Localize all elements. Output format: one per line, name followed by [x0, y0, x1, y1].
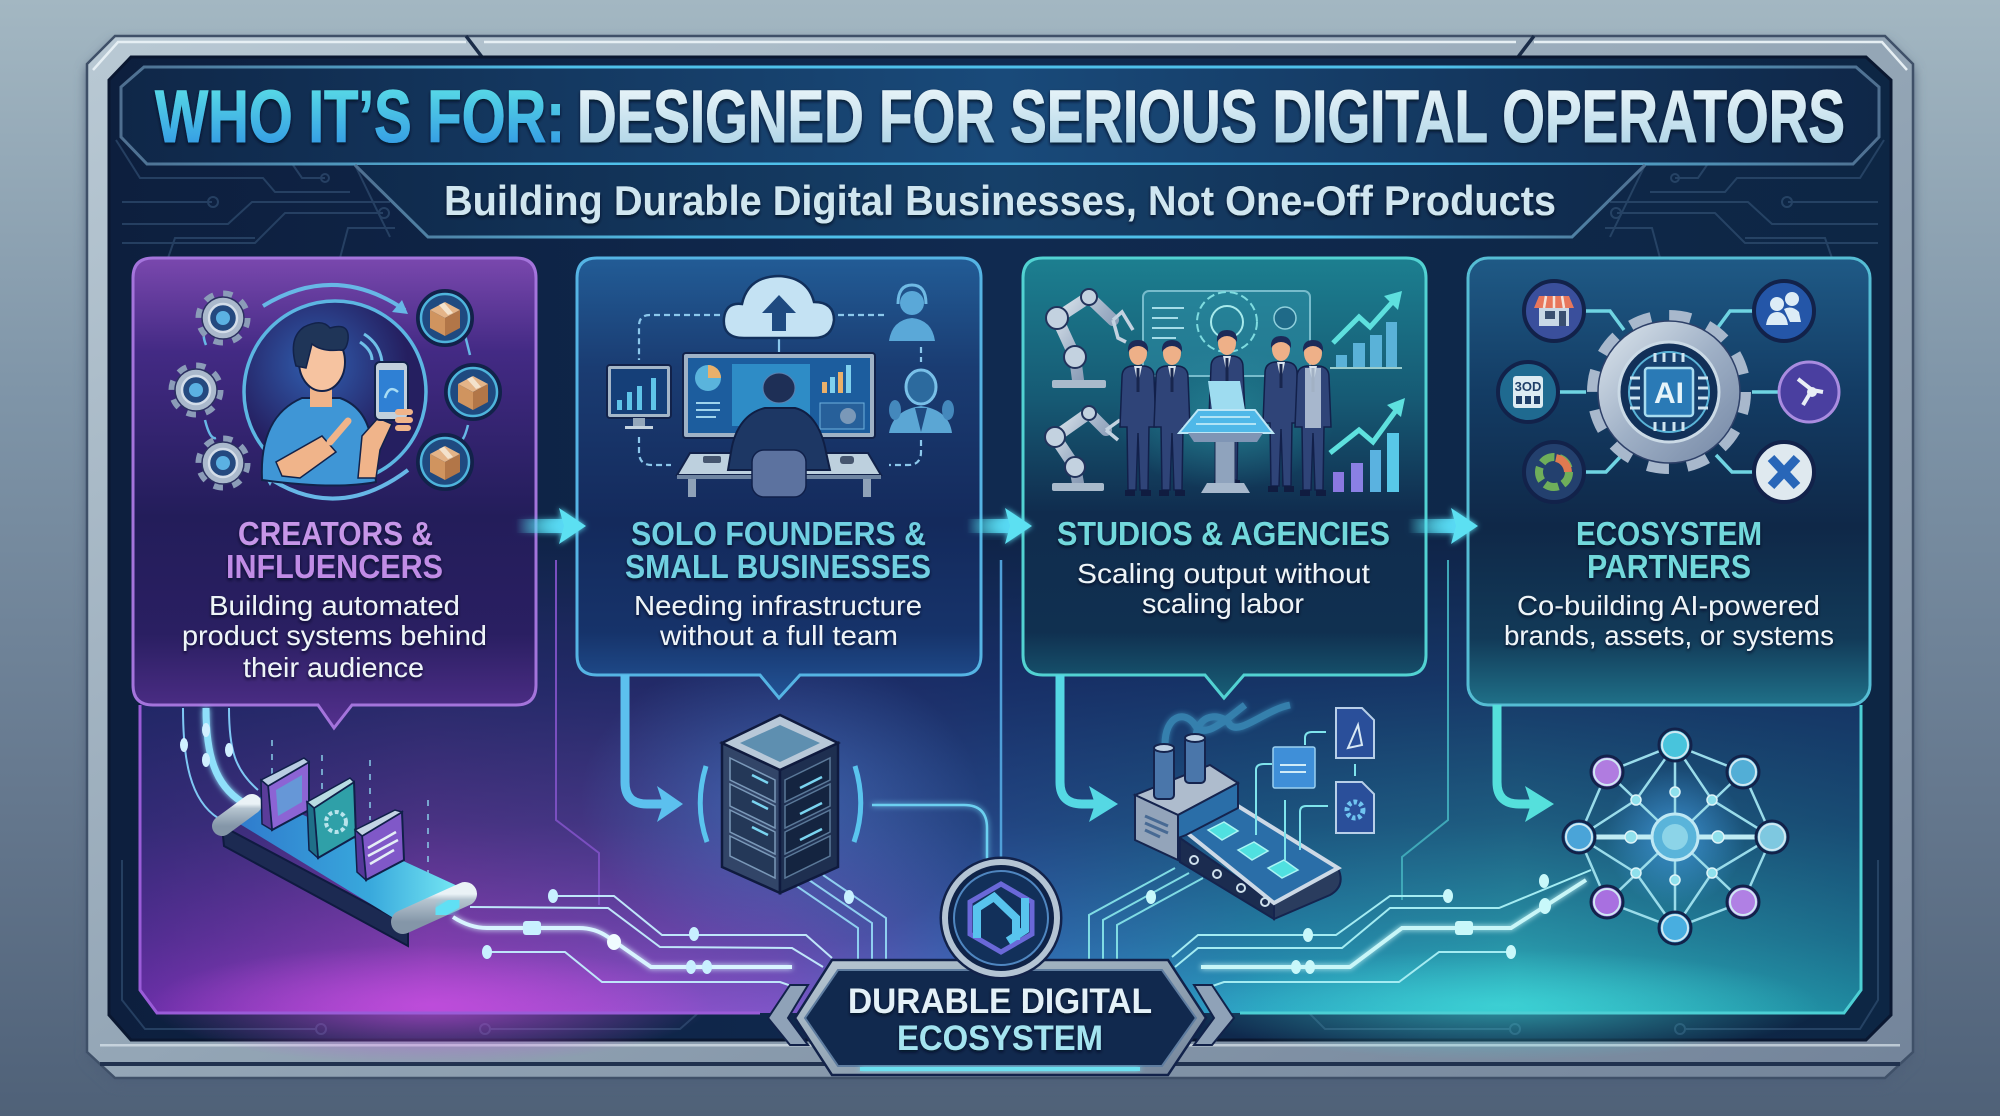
heading: creators: CREATORS & — [238, 515, 433, 552]
description: creators: product systems behind — [182, 620, 487, 651]
partner: people — [1754, 281, 1814, 341]
icon: founder at workstation with cloud — [607, 276, 954, 497]
subtitle text: Building Durable Digital Businesses, Not One-Off Products — [444, 177, 1556, 224]
decorative circuit traces — [116, 140, 1884, 1034]
panel: ecosystem partners — [1468, 258, 1870, 705]
icon: AI gear with partner nodes — [1498, 281, 1839, 502]
subtitle banner — [355, 165, 1645, 237]
icon: conveyor with digital product cards — [180, 708, 465, 946]
partner: network share — [1779, 362, 1839, 422]
description: partners — [1504, 590, 1834, 651]
circuit traces: right — [1089, 868, 1591, 990]
dark main panel — [109, 57, 1891, 1040]
icon: factory with documents — [1135, 705, 1374, 919]
AI chip label: AI — [1654, 377, 1684, 410]
icon: network hub — [1563, 729, 1788, 944]
lower glowing panel — [140, 540, 1861, 1065]
description: studios: scaling labor — [1142, 588, 1304, 619]
partner: store — [1524, 281, 1584, 341]
partner: 3D product — [1498, 362, 1558, 422]
arrow: studios down to factory — [1060, 675, 1118, 822]
partner: 3D product: 3OD — [1515, 379, 1541, 394]
title text: who it's for: WHO IT’S FOR: — [155, 75, 565, 158]
arrow: studios to partners — [1408, 508, 1478, 544]
arrow: founders down to server — [625, 675, 683, 822]
circuit traces: left — [453, 875, 886, 990]
icon: server rack — [700, 715, 987, 893]
icon: team with robot arms and growth charts — [1045, 289, 1405, 496]
heading: studios and agencies: STUDIOS & AGENCIES — [1057, 515, 1390, 552]
heading: partners: PARTNERS — [1587, 548, 1751, 585]
partner: white x logo — [1754, 442, 1814, 502]
description: partners: brands, assets, or systems — [1504, 620, 1834, 651]
heading: small businesses: SMALL BUSINESSES — [625, 548, 931, 585]
arrow: creators to founders — [516, 508, 586, 544]
panel: solo founders and small businesses — [577, 258, 981, 698]
description: creators: Building automated — [209, 590, 460, 621]
description: founders: Needing infrastructure — [634, 590, 922, 621]
heading: influencers: INFLUENCERS — [226, 548, 443, 585]
panel: creators and influencers — [133, 258, 536, 728]
badge: durable digital ecosystem — [768, 960, 1234, 1075]
arrow: partners down to network — [1497, 705, 1554, 822]
description: founders — [634, 590, 922, 651]
panel: studios and agencies — [1023, 258, 1426, 698]
partner: gear colourful — [1524, 442, 1584, 502]
logo medallion — [941, 858, 1061, 978]
arrow: founders to studios — [967, 508, 1032, 544]
heading: solo founders: SOLO FOUNDERS & — [631, 515, 926, 552]
description: studios — [1077, 558, 1370, 619]
description: studios: Scaling output without — [1077, 558, 1370, 589]
description: creators: their audience — [243, 652, 424, 683]
description: founders: without a full team — [659, 620, 898, 651]
heading: ecosystem: ECOSYSTEM — [1576, 515, 1762, 552]
title banner — [121, 67, 1879, 164]
description: partners: Co-building AI-powered — [1517, 590, 1820, 621]
description: creators — [182, 590, 487, 683]
icon: creator with phone and product loop — [172, 285, 500, 499]
badge text line one: DURABLE DIGITAL — [848, 982, 1152, 1021]
badge text line two: ECOSYSTEM — [897, 1019, 1103, 1058]
